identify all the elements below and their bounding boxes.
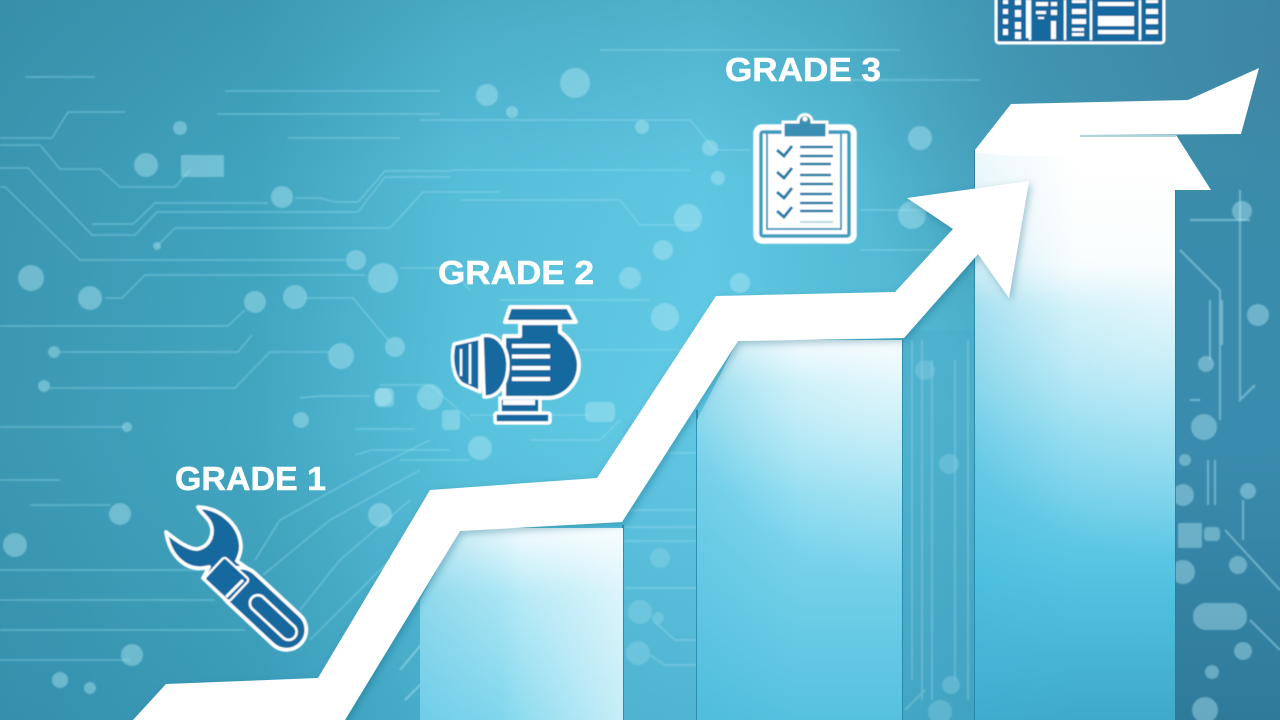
icon: control panel cropped at top: [996, 0, 1164, 43]
motor neck and body: [504, 323, 579, 398]
wrench handle slot: [247, 592, 300, 643]
grade 3 label: GRADE 3: [725, 51, 881, 88]
bar 2: [697, 340, 902, 720]
wrench handle: [213, 559, 315, 658]
icon: clipboard checklist: [755, 114, 855, 242]
bar 3 with top flag: [975, 68, 1259, 720]
bar 3 chevron cap: [1077, 135, 1211, 190]
motor cooling fins: [512, 346, 550, 379]
checkmarks: [777, 146, 792, 217]
motor grille: [453, 338, 480, 392]
motor foot: [500, 398, 540, 414]
motor foot inner slot: [503, 400, 535, 405]
icon: motor: [453, 307, 579, 423]
panel indicators: [1003, 0, 1158, 39]
clip hole: [802, 116, 808, 122]
checklist lines: [800, 147, 833, 211]
flag under-shadow: [1080, 135, 1176, 137]
clipboard clip: [783, 114, 827, 138]
wrench collar slot: [226, 580, 243, 597]
motor grille bars: [461, 344, 470, 384]
last checklist line: [800, 221, 833, 223]
grade 1 label: GRADE 1: [175, 460, 326, 497]
wrench collar: [204, 557, 249, 602]
arrow trend line: [133, 181, 1029, 720]
bar 1: [420, 528, 623, 720]
motor base: [495, 413, 550, 423]
clipboard outer ring: [761, 132, 849, 236]
icon: wrench: [166, 507, 315, 658]
motor top plate: [505, 307, 576, 322]
panel dividers: [1030, 0, 1140, 40]
bar 3 upper flag: [975, 68, 1259, 156]
grade 2 label: GRADE 2: [438, 254, 594, 291]
column band behind bars: [623, 150, 1175, 720]
motor fan cap: [482, 335, 508, 397]
clipboard inner ring: [767, 133, 841, 229]
